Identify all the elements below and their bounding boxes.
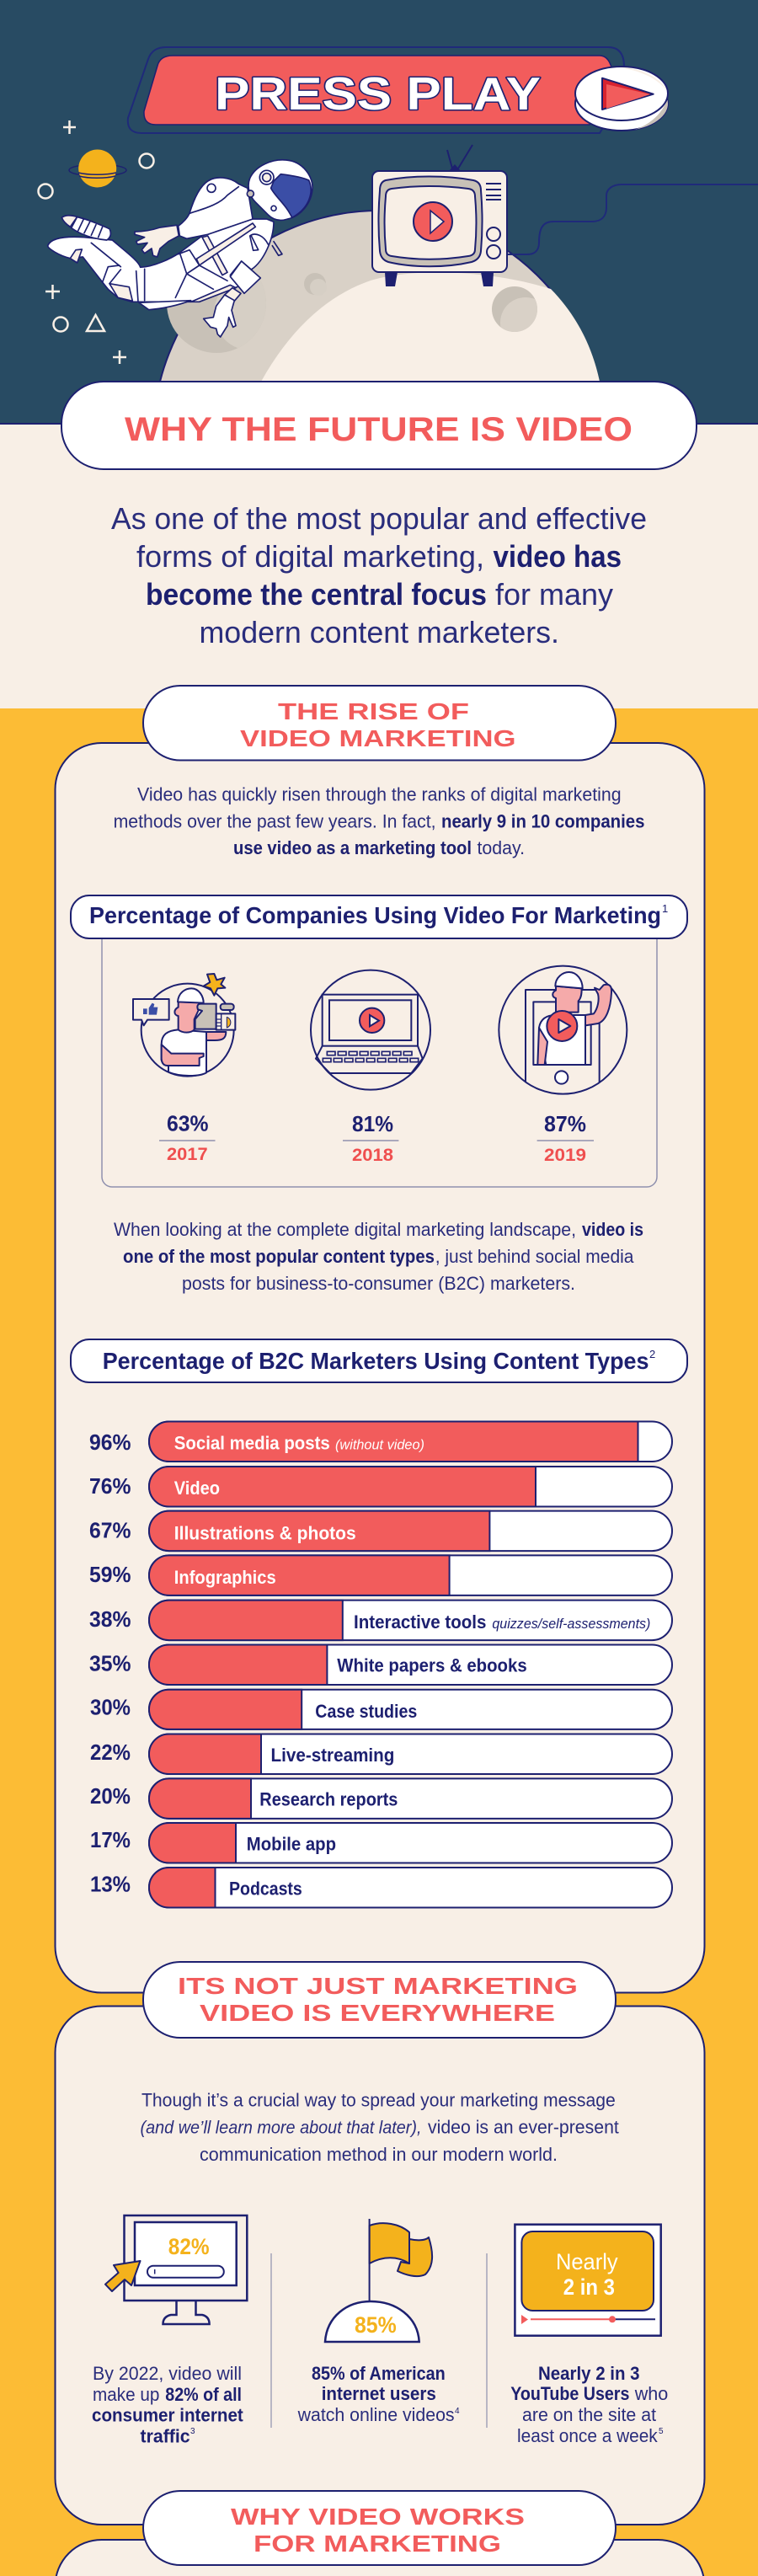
stat: 63% in 2017: 2017 xyxy=(167,1145,208,1164)
text block: nearly 2 in 3 YouTube users xyxy=(510,2363,668,2446)
text block: 85% of American internet users: watch online videos xyxy=(297,2404,455,2425)
panel: the rise of video marketing xyxy=(56,743,704,1993)
bar: 96% social media posts xyxy=(89,1422,672,1462)
stat: 63% in 2017: 63% xyxy=(167,1110,209,1136)
text block: complete digital marketing landscape: video is xyxy=(582,1219,643,1240)
bar: 13% podcasts xyxy=(90,1868,672,1907)
icon: desktop monitor with 82%: 82% xyxy=(168,2234,210,2259)
text block: video has quickly risen: Video has quickly risen through the ranks of digital marketing xyxy=(137,783,622,805)
heading pill: why video works for marketing: WHY VIDEO WORKS xyxy=(231,2504,525,2530)
bar: 59% infographics xyxy=(89,1555,672,1595)
bar: 13% podcasts: Podcasts xyxy=(229,1879,302,1899)
icon: 3D play button xyxy=(575,67,674,135)
bar: 22% live-streaming: Live-streaming xyxy=(271,1745,394,1766)
divider two xyxy=(486,2253,488,2428)
text block: video has quickly risen xyxy=(114,783,645,858)
text block: nearly 2 in 3 YouTube users: Nearly 2 in 3 xyxy=(538,2363,640,2384)
stat: 81% in 2018 xyxy=(343,1111,398,1165)
title banner: Press Play: PRESS PLAY xyxy=(215,67,541,120)
icon: video player nearly 2 in 3: Nearly xyxy=(556,2249,618,2274)
text block: 85% of American internet users: internet users xyxy=(322,2383,436,2404)
bar: 17% mobile app: 17% xyxy=(90,1827,131,1852)
text block: 82% of consumer internet traffic: make up xyxy=(93,2384,159,2405)
text block: video has quickly risen: methods over the past few years. In fact, xyxy=(114,810,436,832)
bar: 38% interactive tools: quizzes/self-assessments) xyxy=(492,1616,650,1632)
wire from television xyxy=(508,184,758,254)
stat: 81% in 2018: 81% xyxy=(352,1111,393,1136)
icon: ringed planet xyxy=(69,150,126,187)
text block: video has quickly risen: use video as a marketing tool xyxy=(233,837,472,858)
illustration: moon xyxy=(159,210,600,381)
bar: 38% interactive tools: 38% xyxy=(89,1606,131,1632)
text block: video has quickly risen: today. xyxy=(477,837,525,858)
text block: nearly 2 in 3 YouTube users: are on the site at xyxy=(522,2404,656,2425)
divider one xyxy=(270,2253,272,2428)
bar: 35% white papers and ebooks: White papers & ebooks xyxy=(337,1655,527,1676)
text block: complete digital marketing landscape: When looking at the complete digital marketing landscape, xyxy=(114,1219,576,1240)
icon: 2018 laptop xyxy=(311,970,430,1090)
bar: 20% research reports: Research reports xyxy=(259,1789,398,1809)
text block: complete digital marketing landscape: , just behind social media xyxy=(435,1246,634,1267)
chart title: percentage of B2C marketers: Percentage of B2C Marketers Using Content Types xyxy=(103,1348,649,1374)
heading pill: why the future is video: WHY THE FUTURE IS VIDEO xyxy=(125,411,633,448)
bar: 67% illustrations and photos: Illustrations & photos xyxy=(174,1523,356,1543)
text block: 82% of consumer internet traffic xyxy=(92,2363,243,2446)
illustration: retro television xyxy=(372,145,507,286)
chart title: percentage of B2C marketers: 2 xyxy=(649,1348,655,1360)
stat: 81% in 2018: 2018 xyxy=(352,1146,393,1165)
heading pill: its not just marketing: VIDEO IS EVERYWHERE xyxy=(200,2000,555,2026)
bar: 67% illustrations and photos: 67% xyxy=(89,1518,131,1543)
bar: 38% interactive tools xyxy=(89,1601,672,1640)
text block: 82% of consumer internet traffic: 82% of all xyxy=(165,2384,242,2405)
icon: flag on mound with 85%: 85% xyxy=(355,2312,397,2338)
decorative space shapes xyxy=(39,120,153,364)
bar: 67% illustrations and photos xyxy=(89,1511,672,1551)
text block: complete digital marketing landscape: one of the most popular content types xyxy=(123,1246,435,1267)
icon: flag on mound with 85% xyxy=(325,2219,432,2342)
heading pill: the rise of video marketing xyxy=(143,686,616,760)
text block: nearly 2 in 3 YouTube users: YouTube Users xyxy=(510,2383,629,2404)
heading pill: why the future is video xyxy=(61,382,697,469)
bar chart: B2C content types xyxy=(89,1422,672,1907)
panel: why video works xyxy=(56,2540,704,2576)
text block: 82% of consumer internet traffic: By 2022, video will xyxy=(93,2363,242,2384)
bar: 59% infographics: Infographics xyxy=(174,1567,276,1588)
intro paragraph: forms of digital marketing, xyxy=(136,539,484,574)
chart title: percentage of companies using video xyxy=(71,895,687,938)
text block: 85% of American internet users xyxy=(297,2363,460,2425)
text block: complete digital marketing landscape xyxy=(114,1219,643,1294)
cream intro band xyxy=(0,424,758,708)
illustration: astronaut xyxy=(48,160,312,337)
intro paragraph: for many xyxy=(495,577,613,612)
intro paragraph: become the central focus xyxy=(146,577,487,612)
icon: desktop monitor with 82% xyxy=(105,2215,247,2324)
text block: crucial way to spread your message: communication method in our modern world. xyxy=(200,2144,558,2165)
bar: 20% research reports: 20% xyxy=(90,1783,131,1809)
bar: 59% infographics: 59% xyxy=(89,1562,131,1587)
chart title: percentage of companies using video: Percentage of Companies Using Video For Marketing xyxy=(89,902,661,928)
bar: 17% mobile app xyxy=(90,1823,672,1863)
bar: 96% social media posts: (without video) xyxy=(335,1437,424,1452)
title banner: Press Play xyxy=(128,47,624,133)
heading pill: its not just marketing: ITS NOT JUST MARKETING xyxy=(178,1973,578,1999)
stat: 63% in 2017 xyxy=(159,1110,216,1164)
intro paragraph: As one of the most popular and effective xyxy=(111,501,647,536)
text block: 85% of American internet users: 4 xyxy=(455,2407,460,2416)
heading pill: the rise of video marketing: VIDEO MARKETING xyxy=(240,725,515,751)
bar: 17% mobile app: Mobile app xyxy=(247,1833,336,1854)
icon: 2017 videographer xyxy=(133,974,235,1077)
intro paragraph: video has xyxy=(494,539,622,574)
intro paragraph xyxy=(111,501,647,649)
heading pill: why video works for marketing xyxy=(143,2491,616,2565)
bar: 22% live-streaming: 22% xyxy=(90,1740,131,1765)
text block: nearly 2 in 3 YouTube users: who xyxy=(634,2383,668,2404)
text block: 82% of consumer internet traffic: consumer internet xyxy=(92,2404,243,2425)
chart frame: percentage of companies xyxy=(102,922,657,1187)
icon: video player nearly 2 in 3: 2 in 3 xyxy=(563,2274,615,2300)
bar: 30% case studies: 30% xyxy=(90,1695,131,1720)
chart title: percentage of B2C marketers xyxy=(71,1339,687,1382)
stat: 87% in 2019 xyxy=(537,1111,594,1165)
bar: 30% case studies xyxy=(90,1690,672,1729)
chart title: percentage of companies using video: 1 xyxy=(662,902,668,915)
bar: 35% white papers and ebooks xyxy=(89,1644,672,1685)
icon: 2019 phone video xyxy=(499,966,627,1094)
text block: crucial way to spread your message: video is an ever-present xyxy=(428,2117,619,2138)
stat: 87% in 2019: 87% xyxy=(544,1111,586,1136)
stat: 87% in 2019: 2019 xyxy=(544,1146,586,1165)
text block: nearly 2 in 3 YouTube users: least once a week xyxy=(517,2425,659,2446)
heading pill: the rise of video marketing: THE RISE OF xyxy=(278,698,469,724)
bar: 38% interactive tools: Interactive tools xyxy=(354,1611,486,1633)
icon: video player nearly 2 in 3 xyxy=(515,2225,661,2336)
heading pill: why video works for marketing: FOR MARKETING xyxy=(254,2531,501,2557)
text block: complete digital marketing landscape: posts for business-to-consumer (B2C) marketers. xyxy=(182,1273,575,1294)
text block: crucial way to spread your message: Though it’s a crucial way to spread your marketing message xyxy=(141,2090,616,2111)
intro paragraph: modern content marketers. xyxy=(199,615,559,649)
text block: 82% of consumer internet traffic: 3 xyxy=(190,2427,195,2436)
bar: 22% live-streaming xyxy=(90,1734,672,1774)
text block: crucial way to spread your message xyxy=(140,2090,619,2165)
bar: 20% research reports xyxy=(90,1778,672,1819)
bar: 96% social media posts: Social media posts xyxy=(174,1432,330,1454)
text block: crucial way to spread your message: (and we’ll learn more about that later), xyxy=(140,2118,421,2138)
bar: 76% video: 76% xyxy=(89,1473,131,1499)
heading pill: its not just marketing xyxy=(143,1962,616,2038)
text block: video has quickly risen: nearly 9 in 10 companies xyxy=(441,810,645,832)
bar: 76% video xyxy=(89,1467,672,1506)
bar: 30% case studies: Case studies xyxy=(315,1701,417,1722)
text block: nearly 2 in 3 YouTube users: 5 xyxy=(659,2427,664,2436)
bar: 35% white papers and ebooks: 35% xyxy=(89,1651,131,1676)
bar: 13% podcasts: 13% xyxy=(90,1872,131,1897)
panel: video is everywhere xyxy=(56,2007,704,2525)
text block: 85% of American internet users: 85% of American xyxy=(312,2363,446,2384)
bar: 96% social media posts: 96% xyxy=(89,1430,131,1455)
text block: 82% of consumer internet traffic: traffic xyxy=(140,2425,190,2446)
navy header background xyxy=(0,0,758,424)
bar: 76% video: Video xyxy=(174,1478,220,1499)
